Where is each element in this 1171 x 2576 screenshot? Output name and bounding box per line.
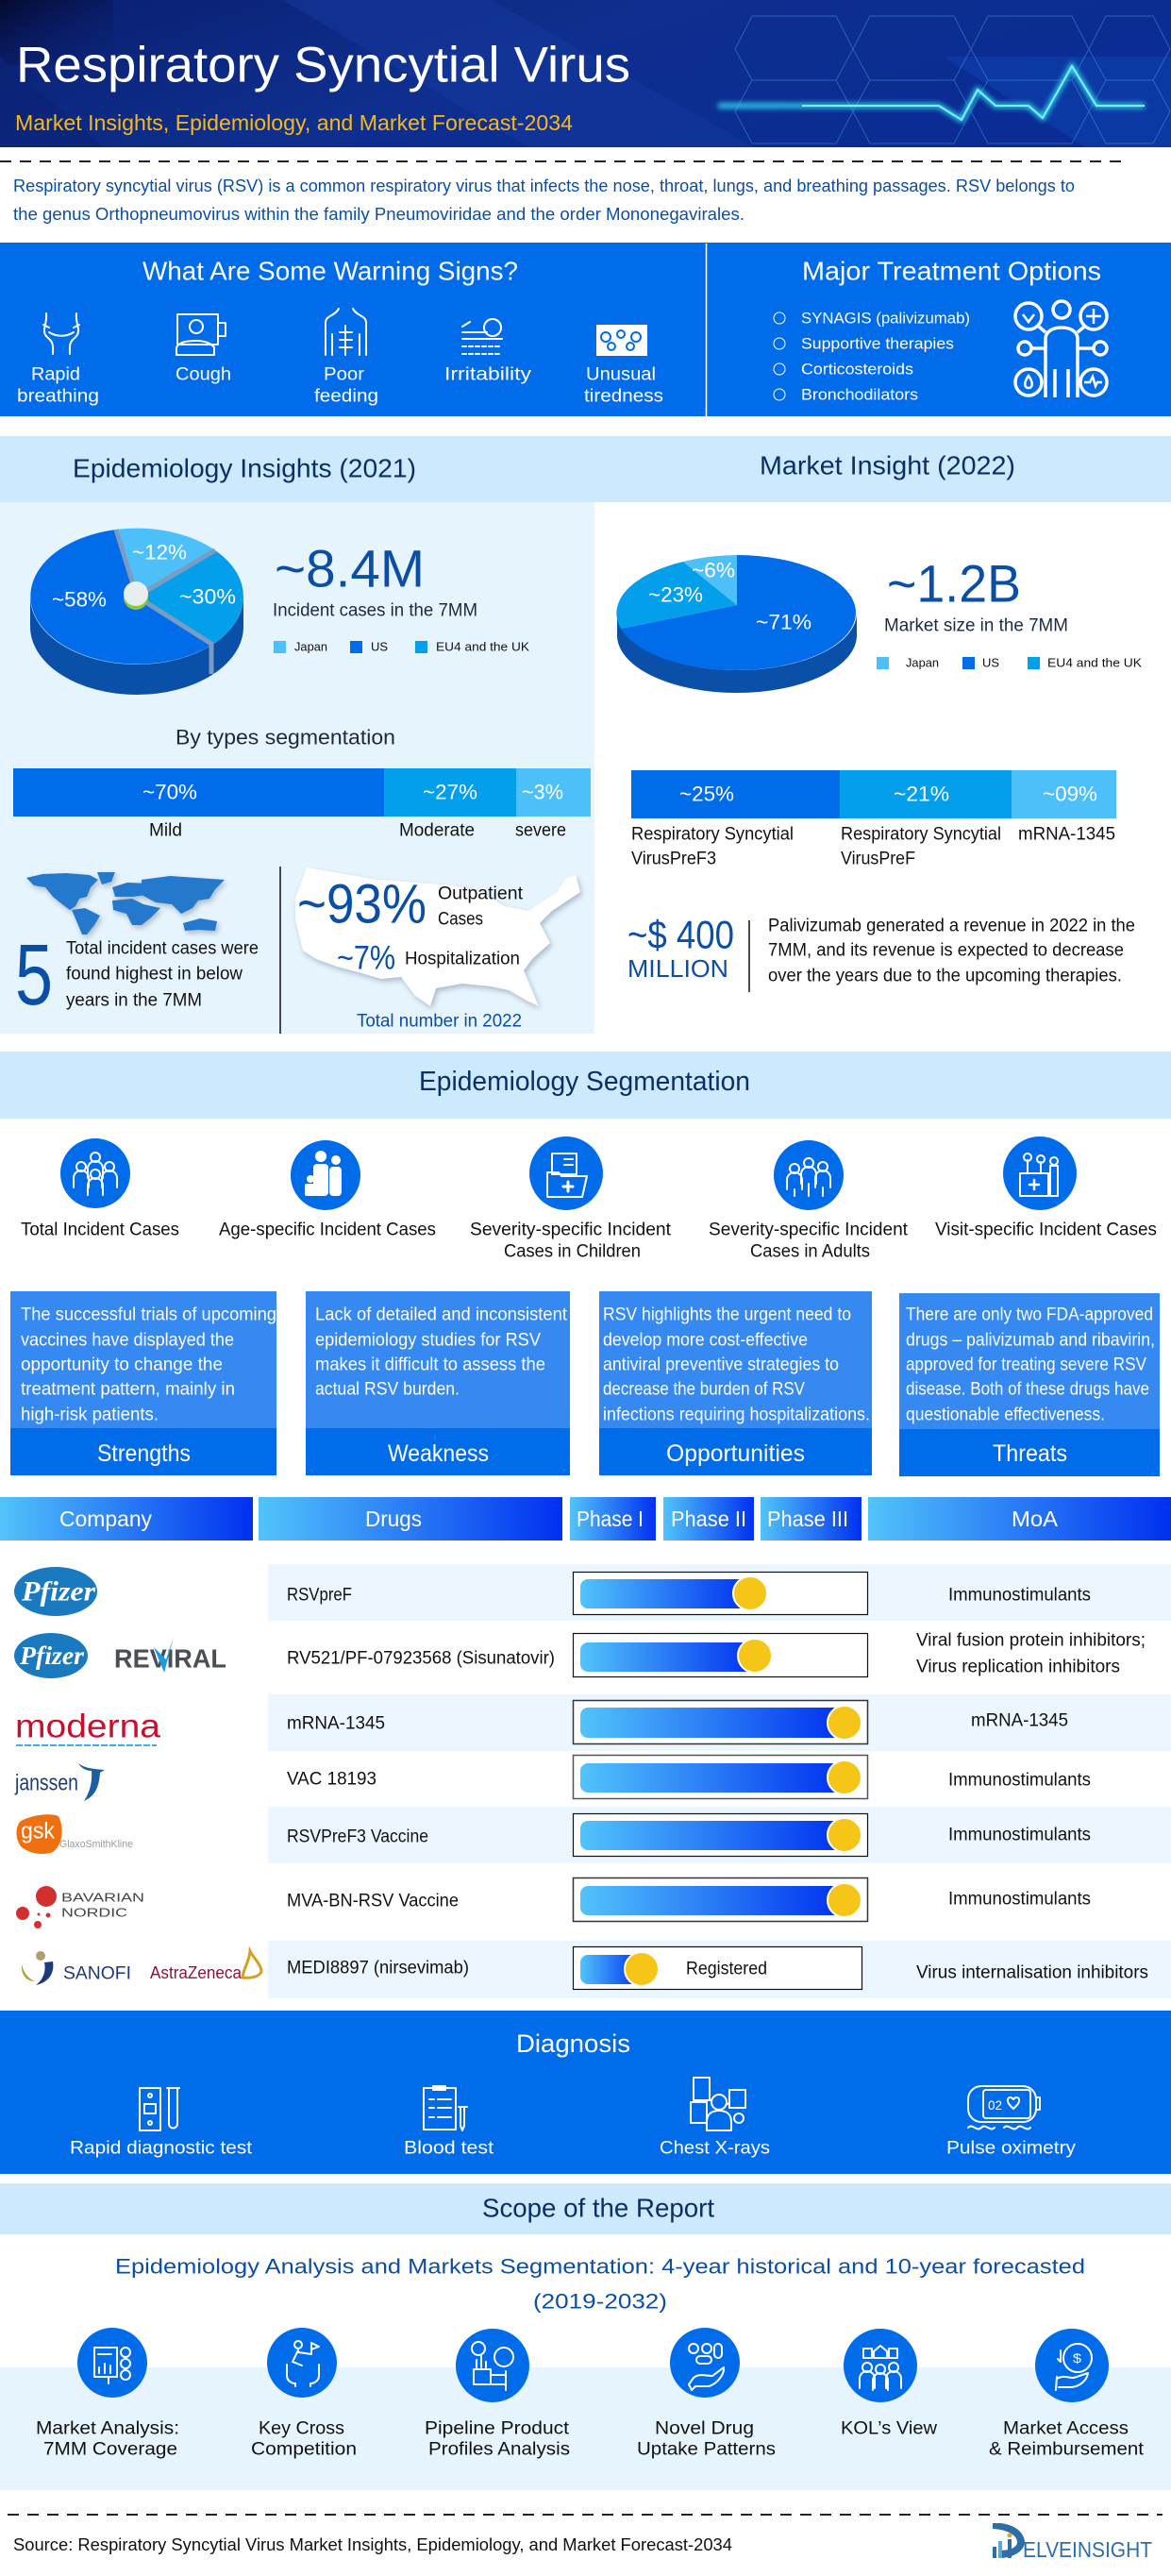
table row: MVA-BN-RSV Vaccine: MVA-BN-RSV Vaccine <box>287 1892 459 1911</box>
item: pulse oximetry <box>946 2086 1077 2158</box>
panel: SWOT strengths: high-risk patients. <box>21 1405 159 1425</box>
callout: palivizumab revenue: MILLION <box>627 954 728 983</box>
stacked bar: drug share: ~09% <box>1043 782 1097 806</box>
icon: rapid breathing <box>43 313 79 354</box>
progress bar: registered: Registered <box>686 1960 767 1978</box>
panel: SWOT strengths: The successful trials of upcoming <box>21 1305 276 1325</box>
logo: GSK: gsk <box>21 1818 56 1844</box>
item: KOL view: KOL’s View <box>841 2418 937 2439</box>
callout: palivizumab revenue: ~$ 400 <box>627 912 734 957</box>
stacked bar: drug share: mRNA-1345 <box>1018 825 1115 844</box>
pie chart: market size: ~6% <box>692 559 735 581</box>
section: scope of the report <box>0 2183 1171 2490</box>
panel: SWOT opportunities: decrease the burden of RSV <box>603 1380 805 1399</box>
panel: SWOT threats: questionable effectiveness. <box>906 1405 1105 1425</box>
callout: five years: found highest in below <box>66 965 243 984</box>
stacked bar: severity types: Moderate <box>399 821 475 840</box>
pie chart: market size <box>616 555 857 693</box>
logo: DelveInsight <box>993 2523 1152 2562</box>
callout: palivizumab revenue: over the years due to the upcoming therapies. <box>768 967 1122 985</box>
table row: RV521 <box>14 1631 1146 1678</box>
panel: warning signs and treatment <box>0 243 1171 416</box>
map callout: US outpatient and hospitalization: Total number in 2022 <box>357 1012 522 1031</box>
table row: RSVpreF <box>14 1564 1171 1621</box>
stat: incident cases: Incident cases in the 7MM <box>273 600 477 621</box>
map callout: US outpatient and hospitalization: Hospitalization <box>405 950 520 968</box>
table header: MoA <box>1012 1507 1059 1531</box>
logo: Sanofi and AstraZeneca: SANOFI <box>63 1963 131 1984</box>
table row: RV521: RV521/PF-07923568 (Sisunatovir) <box>287 1648 555 1669</box>
header banner <box>0 0 1171 147</box>
panel: SWOT weakness: actual RSV burden. <box>315 1380 460 1399</box>
stacked bar: drug share <box>631 770 1116 868</box>
stacked bar: severity types: ~27% <box>423 780 477 804</box>
panel: SWOT strengths: Strengths <box>97 1440 191 1467</box>
item: key cross competition: Key Cross <box>259 2418 344 2439</box>
item: key cross competition <box>251 2328 357 2460</box>
panel: SWOT opportunities: RSV highlights the urgent need to <box>603 1305 851 1325</box>
logo: Pfizer <box>14 1567 97 1616</box>
panel: epidemiology insights <box>0 502 594 1034</box>
callout: five years <box>15 927 259 1023</box>
item: blood test: Blood test <box>404 2139 494 2158</box>
stacked bar: drug share: Respiratory Syncytial <box>841 825 1001 844</box>
logo: Sanofi and AstraZeneca: AstraZeneca <box>150 1963 243 1982</box>
label: unusual tiredness: tiredness <box>584 387 663 406</box>
progress bar: phase III <box>574 1878 868 1922</box>
label: poor feeding <box>314 364 378 406</box>
panel: SWOT threats: disease. Both of these drugs have <box>906 1380 1149 1399</box>
progress bar: phase III <box>574 1814 868 1856</box>
logo: Janssen <box>14 1763 105 1801</box>
label: cough: Cough <box>176 364 231 385</box>
item: rapid diagnostic test <box>70 2088 253 2158</box>
panel: SWOT opportunities: infections requiring hospitalizations. <box>603 1405 870 1425</box>
icon: doctor with symbols <box>1015 301 1107 397</box>
pie chart: incident cases: ~58% <box>52 587 107 612</box>
segment: age-specific: Age-specific Incident Cases <box>219 1220 436 1240</box>
subheading: analysis period: Epidemiology Analysis and Markets Segmentation: 4-year historical and 10-year forecasted <box>115 2254 1085 2279</box>
table row: VAC 18193 <box>14 1756 1091 1801</box>
label: poor feeding: Poor <box>324 364 365 385</box>
table row: MVA-BN-RSV Vaccine: Immunostimulants <box>948 1890 1091 1909</box>
stat: market size: Market size in the 7MM <box>884 615 1068 636</box>
map callout: US outpatient and hospitalization: ~7% <box>337 940 395 976</box>
legend: market size: Japan <box>906 655 939 670</box>
item: market access: & Reimbursement <box>989 2439 1145 2460</box>
icon: irritability <box>462 319 502 354</box>
item: chest x-rays: Chest X-rays <box>660 2139 770 2158</box>
table row: RSVPreF3 Vaccine: Immunostimulants <box>948 1826 1091 1844</box>
title: Respiratory Syncytial Virus <box>16 38 630 93</box>
intro text: Respiratory syncytial virus (RSV) is a common respiratory virus that infects the nose, throat, lungs, and breathing passages. RSV belongs to <box>13 177 1075 195</box>
map callout: US outpatient and hospitalization: ~93% <box>297 874 427 934</box>
intro text: the genus Orthopneumovirus within the family Pneumoviridae and the order Mononegavirales. <box>13 205 744 224</box>
item: market access <box>989 2329 1145 2460</box>
stat: incident cases <box>273 538 477 621</box>
item: pipeline product <box>425 2329 570 2460</box>
stacked bar: severity types <box>13 768 591 840</box>
treatment list: Bronchodilators <box>801 385 918 404</box>
panel: SWOT opportunities: Opportunities <box>666 1440 805 1467</box>
intro text <box>13 177 1075 224</box>
table row: MEDI8897 <box>22 1941 1171 1998</box>
segment: total incident cases: Total Incident Cases <box>21 1220 179 1240</box>
map callout: US outpatient and hospitalization: Outpatient <box>438 884 524 904</box>
treatment list: SYNAGIS (palivizumab) <box>801 310 970 327</box>
legend: incident cases: Japan <box>294 640 327 653</box>
item: market access: $ <box>1073 2350 1081 2366</box>
callout: five years: Total incident cases were <box>66 938 259 959</box>
logo: Sanofi and AstraZeneca <box>22 1951 261 1985</box>
band: insight headings <box>0 436 1171 502</box>
table header: Phase III <box>767 1507 848 1531</box>
panel: SWOT threats <box>899 1293 1160 1476</box>
legend: incident cases: EU4 and the UK <box>436 640 529 653</box>
section: epidemiology segmentation <box>0 1052 1171 1261</box>
segment: severity in adults <box>709 1140 909 1261</box>
logo: DelveInsight: ELVEINSIGHT <box>1023 2537 1152 2562</box>
table row: VAC 18193: Immunostimulants <box>948 1771 1091 1790</box>
table row: mRNA-1345 <box>15 1694 1171 1751</box>
stat: market size <box>884 553 1068 636</box>
item: chest x-rays <box>660 2078 770 2158</box>
panel: SWOT weakness <box>306 1291 570 1475</box>
heading: treatment options: Major Treatment Options <box>802 257 1101 285</box>
panel: SWOT opportunities <box>599 1291 872 1475</box>
logo: Bavarian Nordic <box>16 1886 144 1928</box>
heading: market insight: Market Insight (2022) <box>760 451 1015 480</box>
panel: SWOT threats: approved for treating severe RSV <box>906 1355 1146 1374</box>
table row: RSVpreF: Immunostimulants <box>948 1586 1091 1605</box>
map callout: US outpatient and hospitalization <box>295 867 580 1031</box>
panel: SWOT weakness: makes it difficult to assess the <box>315 1355 545 1374</box>
pie chart: incident cases: ~12% <box>132 540 187 564</box>
callout: palivizumab revenue <box>627 912 1135 992</box>
table row: VAC 18193: VAC 18193 <box>287 1769 376 1790</box>
label: unusual tiredness <box>584 364 663 406</box>
panel: SWOT weakness: Lack of detailed and inconsistent <box>315 1305 568 1325</box>
item: market analysis <box>36 2328 179 2460</box>
stat: market size: ~1.2B <box>887 553 1021 614</box>
subheading: analysis period: (2019-2032) <box>533 2290 667 2313</box>
stacked bar: drug share: ~21% <box>894 782 949 806</box>
icon: unusual tiredness <box>596 325 647 356</box>
panel: SWOT threats: drugs – palivizumab and ribavirin, <box>906 1331 1155 1350</box>
source note: Source: Respiratory Syncytial Virus Market Insights, Epidemiology, and Market Forecast-2034 <box>13 2535 732 2554</box>
heading: epidemiology segmentation: Epidemiology Segmentation <box>419 1067 750 1097</box>
logo: Pfizer and ReViral: REVIRAL <box>114 1644 226 1673</box>
panel: diagnosis <box>0 2011 1171 2174</box>
callout: five years: years in the 7MM <box>66 991 202 1010</box>
treatment list: Corticosteroids <box>801 361 913 378</box>
table header: Drugs <box>365 1507 422 1531</box>
item: KOL view <box>841 2329 937 2439</box>
item: key cross competition: Competition <box>251 2439 357 2460</box>
panel: SWOT weakness: Weakness <box>388 1440 489 1467</box>
callout: palivizumab revenue: 7MM, and its revenue is expected to decrease <box>768 940 1124 961</box>
table row: RSVpreF: RSVpreF <box>287 1586 352 1605</box>
table row: mRNA-1345: mRNA-1345 <box>971 1710 1068 1731</box>
stacked bar: severity types: Mild <box>149 821 182 840</box>
logo: Pfizer: Pfizer <box>21 1576 95 1607</box>
table header: Phase II <box>671 1507 746 1531</box>
segment: severity in children <box>470 1136 672 1261</box>
legend: incident cases: US <box>371 640 388 653</box>
icon: cough <box>176 314 226 355</box>
pie chart: market size: ~71% <box>756 610 811 634</box>
panel: SWOT strengths: opportunity to change the <box>21 1355 223 1374</box>
segment: total incident cases <box>21 1138 179 1240</box>
table row: RV521: Virus replication inhibitors <box>916 1658 1120 1676</box>
logo: Bavarian Nordic: NORDIC <box>61 1905 127 1920</box>
item: pulse oximetry: Pulse oximetry <box>946 2139 1077 2158</box>
logo: Bavarian Nordic: BAVARIAN <box>61 1890 144 1905</box>
logo: GSK <box>16 1814 133 1854</box>
stacked bar: severity types: ~3% <box>522 780 563 804</box>
item: market analysis: 7MM Coverage <box>43 2439 177 2460</box>
subtitle: Market Insights, Epidemiology, and Market Forecast-2034 <box>15 110 573 135</box>
legend: market size <box>877 655 1142 670</box>
segment: severity in adults: Cases in Adults <box>750 1242 870 1261</box>
table header <box>0 1497 1171 1541</box>
legend: incident cases <box>274 640 529 653</box>
progress bar: registered <box>574 1946 862 1990</box>
segment: severity in adults: Severity-specific Incident <box>709 1220 909 1240</box>
table row: mRNA-1345: mRNA-1345 <box>287 1714 385 1733</box>
heading: epidemiology insights: Epidemiology Insights (2021) <box>73 453 416 483</box>
label: irritability: Irritability <box>444 364 532 385</box>
item: novel drug uptake: Novel Drug <box>655 2418 754 2439</box>
label: rapid breathing: Rapid <box>31 364 80 385</box>
table row: MEDI8897: Virus internalisation inhibitors <box>916 1963 1148 1982</box>
item: pipeline product: Profiles Analysis <box>428 2439 570 2460</box>
stat: incident cases: ~8.4M <box>275 538 425 598</box>
item: novel drug uptake: Uptake Patterns <box>637 2439 776 2460</box>
table row: MVA-BN-RSV Vaccine <box>16 1878 1091 1928</box>
table row: RSVPreF3 Vaccine <box>16 1807 1171 1863</box>
logo: Pfizer and ReViral: Pfizer <box>19 1642 85 1670</box>
subheading: analysis period <box>115 2254 1085 2313</box>
segment: visit-specific <box>935 1136 1157 1240</box>
table row: RV521: Viral fusion protein inhibitors; <box>916 1631 1146 1650</box>
stacked bar: drug share: ~25% <box>679 782 734 806</box>
item: market access: Market Access <box>1003 2418 1129 2439</box>
progress bar: phase II <box>574 1573 868 1614</box>
stacked bar: drug share: VirusPreF <box>841 850 915 868</box>
item: market analysis: Market Analysis: <box>36 2418 179 2439</box>
progress bar: phase III <box>574 1756 868 1799</box>
stacked bar: drug share: VirusPreF3 <box>631 850 716 868</box>
pie chart: incident cases <box>30 529 243 695</box>
label: unusual tiredness: Unusual <box>586 364 656 385</box>
item: pipeline product: Pipeline Product <box>425 2418 570 2439</box>
stacked bar: severity types: ~70% <box>142 780 197 804</box>
panel: SWOT opportunities: develop more cost-effective <box>603 1331 808 1350</box>
table row: RSVPreF3 Vaccine: RSVPreF3 Vaccine <box>287 1827 428 1846</box>
panel: market insight <box>616 553 1142 992</box>
segment: severity in children: Cases in Children <box>504 1242 641 1261</box>
stacked bar: severity types: severe <box>515 821 566 840</box>
panel: SWOT strengths: treatment pattern, mainly in <box>21 1380 235 1399</box>
table header: Company <box>59 1507 152 1531</box>
treatment list: Supportive therapies <box>801 334 954 353</box>
item: pulse oximetry: 02 <box>988 2097 1002 2113</box>
item: blood test <box>404 2086 494 2158</box>
segment: visit-specific: Visit-specific Incident Cases <box>935 1220 1157 1240</box>
heading: warning signs: What Are Some Warning Signs? <box>142 257 518 285</box>
label: rapid breathing: breathing <box>17 387 99 406</box>
callout: palivizumab revenue: Palivizumab generated a revenue in 2022 in the <box>768 916 1135 936</box>
pie chart: incident cases: ~30% <box>179 585 236 608</box>
segment: severity in children: Severity-specific Incident <box>470 1220 672 1240</box>
progress bar: phase III <box>574 1701 868 1744</box>
legend: market size: EU4 and the UK <box>1047 655 1142 670</box>
callout: five years: 5 <box>15 927 53 1023</box>
segment: age-specific <box>219 1140 436 1240</box>
heading: scope: Scope of the Report <box>482 2194 714 2222</box>
label: rapid breathing <box>17 364 99 406</box>
logo: Janssen: janssen <box>14 1771 78 1795</box>
progress bar: phase II <box>574 1633 868 1676</box>
item: rapid diagnostic test: Rapid diagnostic test <box>70 2139 253 2158</box>
logo: GSK: GlaxoSmithKline <box>59 1839 133 1850</box>
legend: market size: US <box>982 655 999 670</box>
treatment list <box>774 310 970 404</box>
icon: poor feeding <box>326 309 366 355</box>
panel: SWOT threats: Threats <box>993 1440 1067 1467</box>
table header: Phase I <box>577 1507 644 1531</box>
logo: Pfizer and ReViral <box>14 1633 226 1678</box>
panel: SWOT weakness: epidemiology studies for RSV <box>315 1331 541 1350</box>
item: novel drug uptake <box>637 2328 776 2460</box>
panel: SWOT opportunities: antiviral preventive strategies to <box>603 1355 839 1374</box>
heading: by types segmentation: By types segmentation <box>176 725 395 749</box>
panel: SWOT strengths: vaccines have displayed the <box>21 1331 234 1350</box>
heading: diagnosis: Diagnosis <box>516 2029 630 2058</box>
pie chart: market size: ~23% <box>648 583 703 606</box>
map callout: US outpatient and hospitalization: Cases <box>438 910 483 929</box>
logo: Moderna: moderna <box>15 1709 161 1744</box>
panel: SWOT strengths <box>10 1291 276 1475</box>
panel: SWOT threats: There are only two FDA-approved <box>906 1305 1153 1325</box>
table row: MEDI8897: MEDI8897 (nirsevimab) <box>287 1958 469 1978</box>
label: poor feeding: feeding <box>314 387 378 406</box>
icon: world map <box>26 872 225 934</box>
stacked bar: drug share: Respiratory Syncytial <box>631 825 794 844</box>
